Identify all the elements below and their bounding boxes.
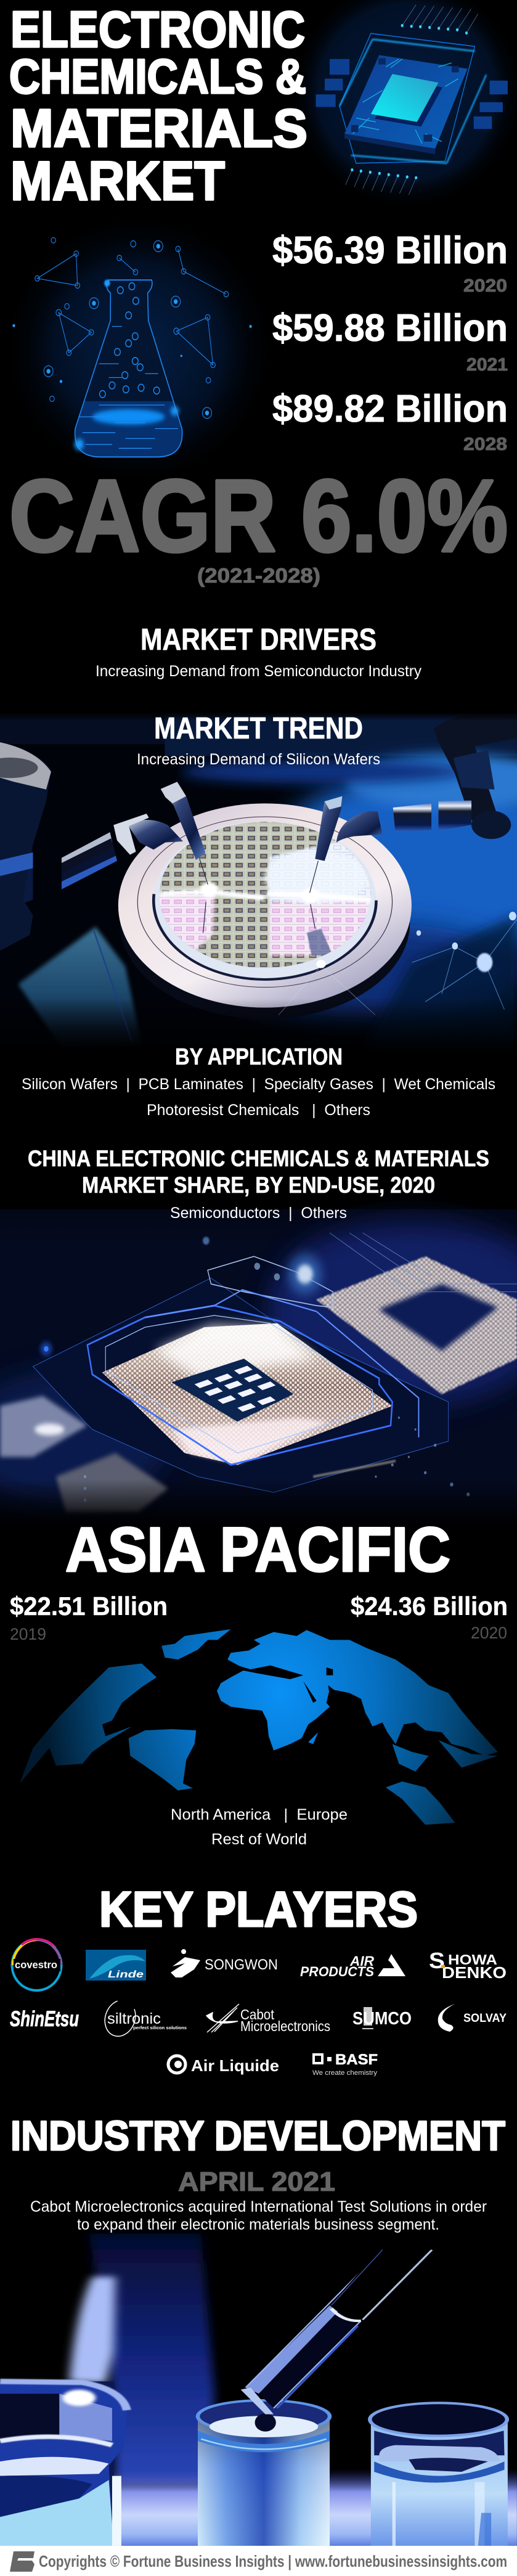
illustration: silicon wafer probe station <box>0 714 517 1043</box>
title: MARKET <box>10 150 225 211</box>
panel: market drivers <box>96 623 421 680</box>
logo: BASF: We create chemistry <box>312 2069 378 2077</box>
value 2020: $24.36 Billion <box>351 1592 508 1621</box>
market value 2020: 2020 <box>463 276 507 296</box>
value 2020: 2020 <box>471 1624 507 1642</box>
other regions list: North America | Europe <box>171 1806 348 1823</box>
footer <box>0 2546 517 2576</box>
logo: Cabot Microelectronics: Cabot <box>240 2006 275 2022</box>
logo: Songwon: SONGWON <box>205 1957 278 1973</box>
logo: Siltronic <box>100 1996 187 2040</box>
logo: Linde: Linde <box>108 1969 144 1980</box>
CAGR period: (2021-2028) <box>197 564 320 587</box>
logo: Air Liquide: Air Liquide <box>191 2056 279 2075</box>
heading: key players: KEY PLAYERS <box>99 1882 418 1937</box>
icon: Fortune Business Insights logo <box>10 2551 35 2572</box>
logo: Air Products: PRODUCTS <box>300 1964 374 1979</box>
panel: china market share with chip image <box>0 1128 517 1526</box>
market value 2028: $89.82 Billion <box>272 388 508 430</box>
logo: Solvay <box>438 2004 507 2032</box>
application list line 2: Photoresist Chemicals | Others <box>147 1102 370 1119</box>
panel: key players <box>10 1882 507 2077</box>
world globe map <box>20 1629 498 1825</box>
illustration: processor chip <box>0 1128 517 1526</box>
title <box>9 1 307 211</box>
development text: Cabot Microelectronics acquired International Test Solutions in order <box>30 2198 487 2215</box>
logo: Showa Denko: DENKO <box>442 1963 507 1982</box>
date: APRIL 2021 <box>178 2167 335 2197</box>
panel: market trend wafer image <box>0 714 517 1043</box>
driver text: Increasing Demand from Semiconductor Industry <box>96 663 421 680</box>
logo: Siltronic: perfect silicon solutions <box>133 2026 187 2030</box>
title: ELECTRONIC <box>10 1 305 58</box>
logo: covestro <box>12 1939 62 1990</box>
value 2020 <box>351 1592 508 1642</box>
logo: Shin-Etsu: ShinEtsu <box>10 2007 79 2031</box>
heading: china market share line 2: MARKET SHARE, BY END-USE, 2020 <box>82 1172 435 1198</box>
title: MATERIALS <box>10 99 307 158</box>
market value 2028 <box>272 388 508 454</box>
illustration: pipette and glass beakers <box>0 2233 517 2546</box>
icon: microchip <box>290 0 517 210</box>
panel: industry development <box>0 2112 517 2546</box>
logo: BASF <box>312 2051 378 2077</box>
logo: Cabot Microelectronics: Microelectronics <box>240 2018 330 2034</box>
market value 2021 <box>272 307 508 375</box>
panel: asia pacific <box>10 1515 508 1848</box>
market value 2020 <box>272 229 508 296</box>
logo: Cabot Microelectronics <box>206 2004 330 2034</box>
logo: Showa Denko <box>429 1948 507 1982</box>
logo: Showa Denko: S <box>429 1948 445 1973</box>
logo: BASF: BASF <box>335 2051 378 2068</box>
heading: by application: BY APPLICATION <box>175 1044 343 1070</box>
logo: Showa Denko: HOWA <box>448 1952 497 1968</box>
title: CHEMICALS & <box>9 49 306 104</box>
development text <box>30 2198 487 2233</box>
logo: Air Products <box>300 1953 405 1979</box>
logo: SUMCO: SUMCO <box>352 2009 412 2029</box>
heading: market trend: MARKET TREND <box>154 712 363 745</box>
heading: asia pacific: ASIA PACIFIC <box>65 1515 450 1585</box>
logo: Solvay: SOLVAY <box>463 2012 507 2025</box>
application list line 1: Silicon Wafers | PCB Laminates | Specialty Gases | Wet Chemicals <box>22 1076 495 1093</box>
hero panel: title, chip, flask, values, CAGR <box>0 0 517 587</box>
value 2019: $22.51 Billion <box>10 1592 168 1621</box>
other regions list: Rest of World <box>211 1831 307 1848</box>
panel: by application <box>22 1044 495 1119</box>
logo: Air Products: AIR <box>349 1953 374 1969</box>
market value 2020: $56.39 Billion <box>272 229 508 272</box>
trend text: Increasing Demand of Silicon Wafers <box>137 751 380 768</box>
logo: covestro: covestro <box>15 1959 57 1971</box>
market value 2021: $59.88 Billion <box>272 307 508 350</box>
end-use list: Semiconductors | Others <box>170 1204 347 1222</box>
other regions list <box>171 1806 348 1848</box>
value 2019 <box>10 1592 168 1643</box>
heading: market drivers: MARKET DRIVERS <box>140 623 377 656</box>
logo: Siltronic: siltronic <box>107 2010 161 2027</box>
logo: Linde <box>86 1950 146 1981</box>
market value 2028: 2028 <box>463 435 507 454</box>
value 2019: 2019 <box>10 1625 46 1643</box>
market value 2021: 2021 <box>466 355 508 375</box>
logo: Songwon <box>171 1949 278 1977</box>
development text: to expand their electronic materials business segment. <box>77 2216 439 2233</box>
icon: chemistry flask <box>12 235 252 461</box>
